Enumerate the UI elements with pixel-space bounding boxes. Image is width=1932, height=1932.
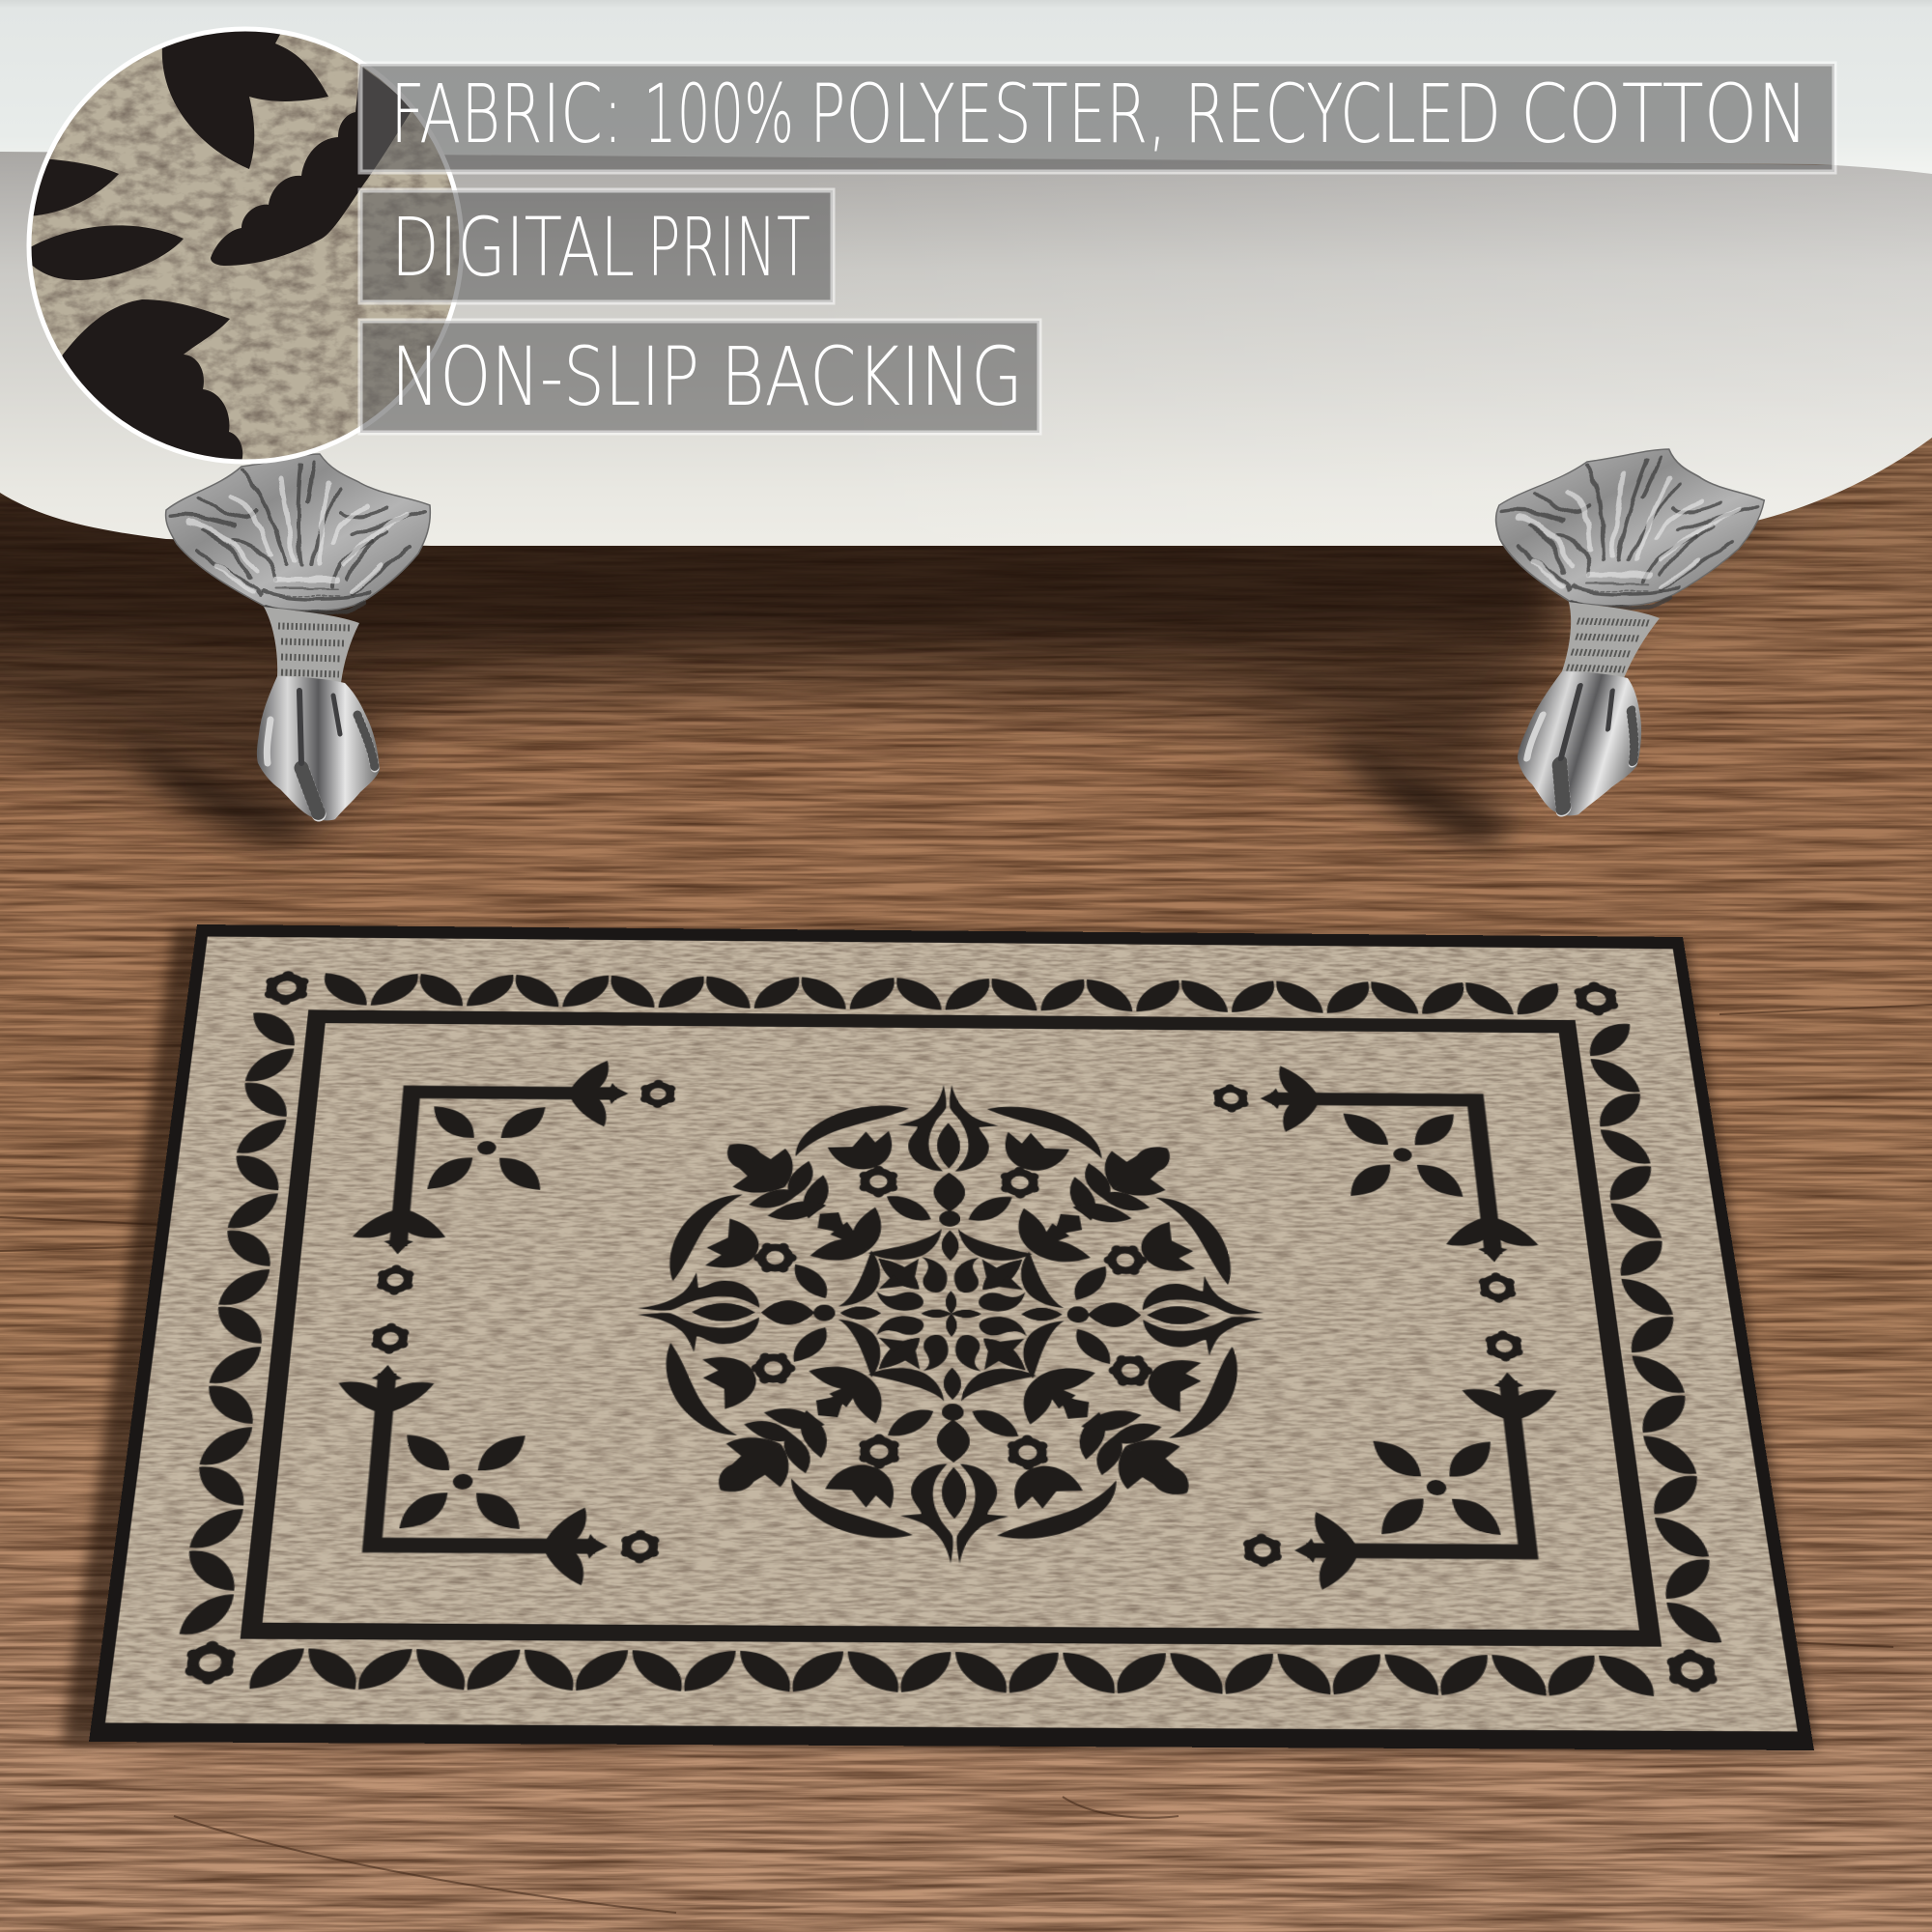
- corner bracket: bottom left: [320, 1322, 667, 1586]
- inner border frame: [251, 1016, 1651, 1638]
- label: non-slip backing: [360, 321, 1039, 433]
- corner flowers: [184, 971, 1719, 1692]
- bathtub rim: [0, 0, 1932, 174]
- corner bracket: top right: [1211, 1065, 1546, 1303]
- right leaf column: [1585, 1023, 1721, 1643]
- corner bracket: top left: [347, 1059, 676, 1297]
- wood floor: [0, 435, 1932, 1932]
- central medallion: [627, 1083, 1283, 1566]
- corner bracket: bottom right: [1229, 1328, 1581, 1591]
- floor shadow under tub: [0, 454, 1835, 845]
- label: fabric: 100%: [643, 67, 794, 161]
- label: digital print: PRINT: [647, 200, 810, 295]
- label: non-slip backing: BACKING: [721, 329, 1023, 424]
- rug base with binding: [89, 924, 1814, 1750]
- claw foot: right: [1408, 449, 1779, 815]
- overlay: fabric close-up and feature labels: [27, 27, 1837, 464]
- circular fabric close-up: [27, 29, 462, 473]
- label: non-slip backing: NON-SLIP: [391, 329, 699, 424]
- top leaf row: [322, 973, 1562, 1015]
- label: fabric: FABRIC:: [390, 67, 623, 161]
- left leaf column: [180, 1012, 298, 1634]
- bathtub body: [0, 150, 1932, 546]
- printed pattern: [173, 971, 1730, 1696]
- label: digital print: DIGITAL: [391, 200, 635, 295]
- rug with printed pattern (drawn flat, then perspective-transformed): [89, 924, 1814, 1750]
- label: fabric: [360, 64, 1834, 172]
- rug drop shadow: [62, 927, 1816, 1750]
- label: digital print: [360, 190, 833, 302]
- claw foot: left: [166, 454, 430, 820]
- bottom leaf row: [249, 1648, 1655, 1696]
- label: fabric: RECYCLED: [1184, 67, 1501, 161]
- label: fabric: COTTON: [1520, 67, 1808, 161]
- label: fabric: POLYESTER,: [810, 67, 1167, 161]
